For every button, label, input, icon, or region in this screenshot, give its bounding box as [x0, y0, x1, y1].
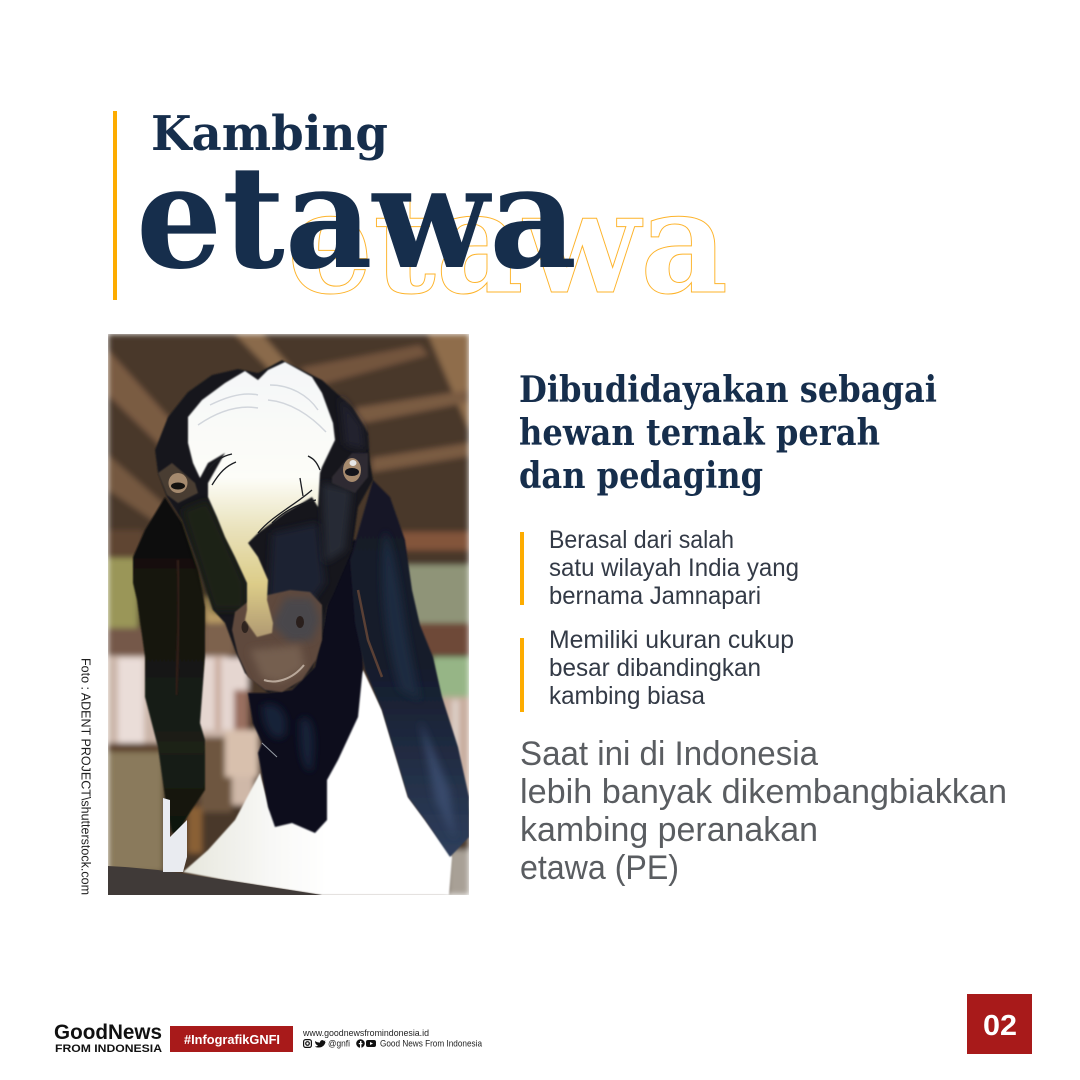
fact 2: Memiliki ukuran cukup — [549, 626, 794, 654]
fact 2 — [520, 626, 794, 712]
goat right ear — [350, 480, 469, 857]
goat head — [155, 360, 373, 693]
footer logo — [54, 1021, 162, 1055]
title — [136, 106, 728, 326]
goat chest — [183, 670, 452, 895]
footer contact: www.goodnewsfromindonesia.id — [302, 1028, 429, 1039]
fact 1 — [520, 526, 799, 610]
fact 1: bernama Jamnapari — [549, 582, 761, 610]
fact 2: besar dibandingkan — [549, 654, 761, 682]
goat neck — [248, 540, 363, 833]
footer logo: FROM INDONESIA — [55, 1043, 162, 1055]
goat left eye — [168, 473, 188, 493]
closing paragraph: lebih banyak dikembangbiakkan — [520, 773, 1007, 811]
goat right eye — [343, 458, 361, 482]
icon: twitter — [315, 1040, 326, 1048]
outlined title echo: etawa — [287, 160, 728, 326]
heading: Dibudidayakan sebagai — [519, 369, 937, 411]
white post — [163, 798, 187, 872]
icon: facebook — [356, 1039, 365, 1048]
icon: instagram — [304, 1040, 311, 1047]
goat blaze — [188, 362, 335, 637]
goat left ear — [133, 497, 205, 833]
footer contact — [302, 1028, 483, 1050]
fact 1 accent bar — [520, 532, 524, 605]
heading — [519, 369, 937, 497]
footer contact: Good News From Indonesia — [380, 1038, 483, 1050]
fact 2 accent bar — [520, 638, 524, 712]
footer logo: GoodNews — [54, 1021, 162, 1044]
heading: dan pedaging — [519, 455, 763, 497]
fact 1: Berasal dari salah — [549, 526, 734, 554]
photo background: barn — [108, 334, 469, 895]
footer contact: @gnfi — [328, 1038, 350, 1050]
title: etawa: etawa — [136, 135, 577, 301]
goat face shading — [158, 395, 368, 610]
photo credit: Foto : ADENT PROJECT\shutterstock.com — [78, 658, 94, 895]
hashtag badge: #InfografikGNFI — [184, 1032, 280, 1047]
fence rail — [108, 866, 322, 895]
title: Kambing: Kambing — [151, 106, 388, 162]
closing paragraph: kambing peranakan — [520, 811, 818, 849]
goat photo — [108, 334, 469, 895]
fact 1: satu wilayah India yang — [549, 554, 799, 582]
page number — [967, 994, 1032, 1054]
hashtag badge — [170, 1026, 293, 1052]
heading: hewan ternak perah — [519, 412, 880, 454]
closing paragraph: etawa (PE) — [520, 849, 679, 887]
closing paragraph — [520, 735, 1007, 887]
goat muzzle — [232, 590, 322, 692]
page number: 02 — [983, 1010, 1017, 1042]
fact 2: kambing biasa — [549, 682, 705, 710]
icon: youtube — [366, 1040, 376, 1047]
closing paragraph: Saat ini di Indonesia — [520, 735, 818, 773]
title accent bar — [113, 111, 117, 300]
